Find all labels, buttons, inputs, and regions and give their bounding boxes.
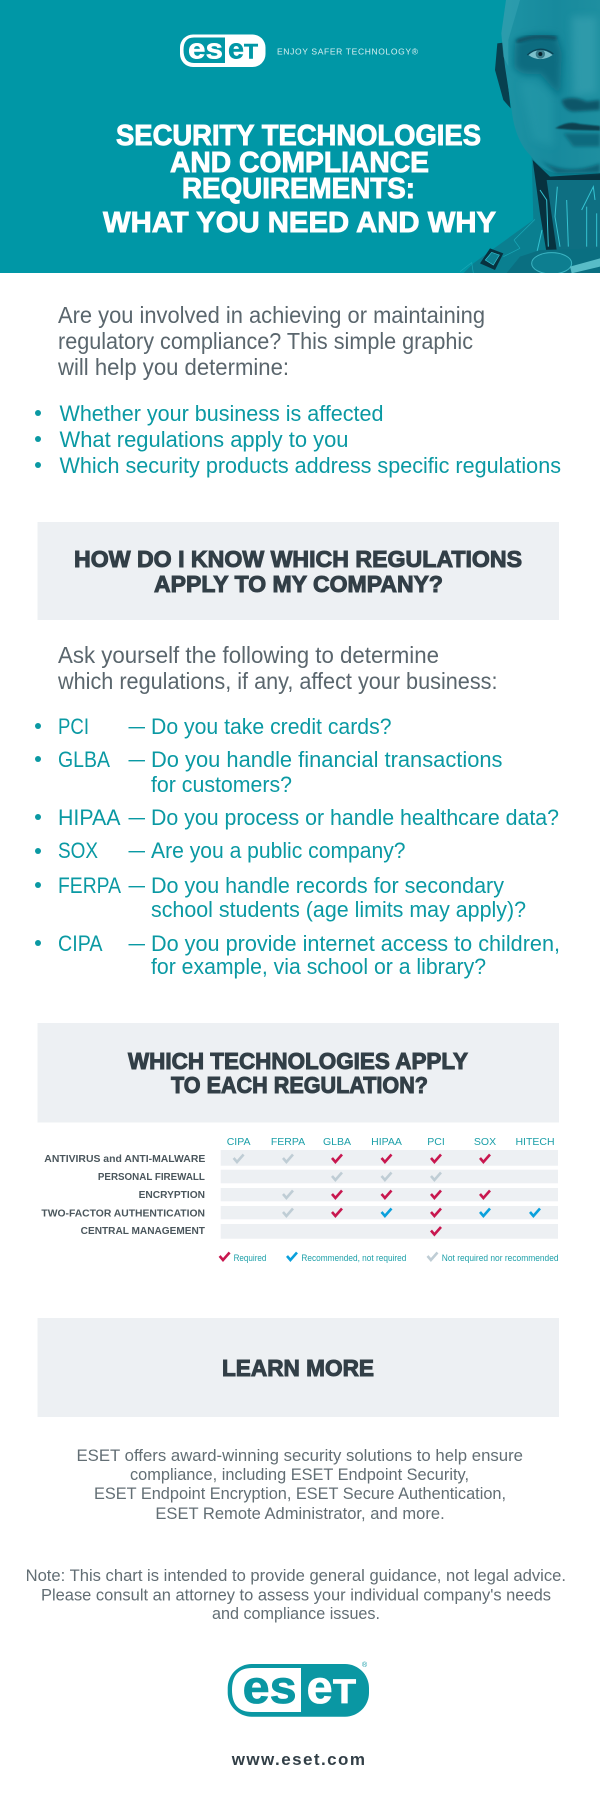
logo: ESET footer: e — [307, 1661, 333, 1713]
column headers: CIPA — [227, 1136, 250, 1148]
text: ESET offers: ESET Endpoint Encryption, ESET Secure Authentication, — [94, 1484, 506, 1503]
title — [103, 120, 496, 239]
regulation question list — [35, 714, 560, 979]
text: ESET offers: ESET offers award-winning security solutions to help ensure — [76, 1446, 523, 1465]
item: PCI: Do you take credit cards? — [151, 714, 392, 739]
panel: how do I know heading — [38, 522, 559, 620]
panel: learn more heading: LEARN MORE — [222, 1355, 374, 1381]
column headers: FERPA — [271, 1136, 305, 1148]
tagline: ENJOY SAFER TECHNOLOGY® — [277, 46, 419, 56]
panel: which technologies heading — [38, 1023, 559, 1122]
panel: how do I know heading: APPLY TO MY COMPANY? — [154, 571, 443, 597]
item: CIPA: Do you provide internet access to children, — [151, 931, 560, 956]
title: WHAT YOU NEED AND WHY — [103, 207, 496, 239]
logo: ESET header: T — [244, 40, 258, 64]
logo: ESET footer: T — [333, 1673, 356, 1711]
column headers: PCI — [427, 1136, 445, 1148]
legend: Required — [234, 1253, 266, 1263]
column headers: HIPAA — [371, 1136, 402, 1148]
item: HIPAA: HIPAA — [58, 805, 121, 830]
item: CIPA: CIPA — [58, 931, 103, 956]
website url: www.eset.com — [231, 1750, 365, 1769]
text: ask yourself — [57, 642, 497, 694]
row: two-factor authentication — [41, 1206, 558, 1220]
item: CIPA: for example, via school or a library? — [151, 954, 486, 979]
legend: Recommended, not required — [301, 1253, 406, 1263]
panel: which technologies heading: WHICH TECHNOLOGIES APPLY — [128, 1048, 468, 1074]
header banner — [0, 0, 600, 277]
item: CIPA — [35, 931, 560, 979]
row: central management: CENTRAL MANAGEMENT — [81, 1226, 205, 1237]
intro text: regulatory compliance? This simple graphic — [58, 328, 473, 354]
row: antivirus: ANTIVIRUS and ANTI-MALWARE — [44, 1154, 206, 1165]
item: FERPA: Do you handle records for secondary — [151, 873, 504, 898]
item: PCI: PCI — [58, 714, 89, 739]
column headers: HITECH — [515, 1136, 555, 1148]
row: two-factor authentication: TWO-FACTOR AUTHENTICATION — [41, 1208, 205, 1220]
text: ESET offers — [76, 1446, 523, 1523]
text: legal note: Note: This chart is intended to provide general guidance, not legal advice. — [26, 1566, 566, 1585]
intro text: Are you involved in achieving or maintaining — [58, 302, 485, 328]
row: personal firewall: PERSONAL FIREWALL — [98, 1172, 205, 1183]
row: encryption — [139, 1188, 558, 1201]
column headers: GLBA — [323, 1136, 351, 1148]
row: personal firewall — [98, 1170, 558, 1183]
legend: Not required nor recommended — [442, 1253, 559, 1263]
intro text: will help you determine: — [57, 354, 289, 380]
intro text — [57, 302, 485, 380]
column headers: SOX — [474, 1136, 496, 1148]
item: FERPA — [35, 873, 526, 922]
logo: ESET footer: es — [243, 1661, 297, 1713]
item: SOX: SOX — [58, 838, 98, 863]
regulation matrix table — [41, 1136, 558, 1239]
item: SOX — [35, 838, 406, 863]
title: REQUIREMENTS: — [182, 173, 415, 205]
item: GLBA: Do you handle financial transactions — [151, 747, 502, 772]
text: legal note: and compliance issues. — [212, 1604, 380, 1623]
item: FERPA: school students (age limits may apply)? — [151, 897, 526, 922]
row: encryption: ENCRYPTION — [139, 1190, 205, 1201]
logo: ESET header — [180, 34, 266, 67]
legend — [220, 1252, 559, 1263]
text: legal note: Please consult an attorney to assess your individual company's needs — [41, 1586, 551, 1604]
text: ask yourself: Ask yourself the following to determine — [58, 642, 439, 668]
item: GLBA: GLBA — [58, 747, 110, 772]
column headers — [227, 1136, 555, 1148]
item: GLBA: for customers? — [151, 772, 292, 797]
intro bullet list: Which security products address specific regulations — [60, 453, 561, 478]
panel: learn more heading — [38, 1318, 559, 1417]
item: FERPA: FERPA — [58, 873, 121, 898]
logo: ESET header: e — [228, 34, 244, 66]
item: SOX: Are you a public company? — [151, 838, 406, 863]
row: antivirus — [44, 1150, 558, 1166]
title: SECURITY TECHNOLOGIES — [116, 120, 481, 152]
title: AND COMPLIANCE — [170, 147, 429, 179]
logo: ESET footer — [228, 1661, 369, 1717]
intro bullet list — [35, 401, 561, 478]
item: GLBA — [35, 747, 502, 797]
text: ask yourself: which regulations, if any, affect your business: — [57, 668, 497, 694]
intro bullet list: What regulations apply to you — [60, 427, 348, 452]
item: HIPAA: Do you process or handle healthcare data? — [151, 805, 559, 830]
text: ESET offers: compliance, including ESET Endpoint Security, — [130, 1465, 469, 1484]
illustration: robot head — [460, 0, 600, 277]
panel: which technologies heading: TO EACH REGULATION? — [171, 1072, 428, 1098]
intro bullet list: Whether your business is affected — [60, 401, 384, 426]
panel: how do I know heading: HOW DO I KNOW WHICH REGULATIONS — [74, 546, 522, 572]
logo: ESET footer: ® — [362, 1661, 368, 1669]
row: central management — [81, 1224, 558, 1239]
text: ESET offers: ESET Remote Administrator, and more. — [155, 1504, 445, 1523]
logo: ESET header: es — [188, 34, 223, 66]
item: PCI — [35, 714, 392, 739]
text: legal note — [26, 1566, 566, 1623]
